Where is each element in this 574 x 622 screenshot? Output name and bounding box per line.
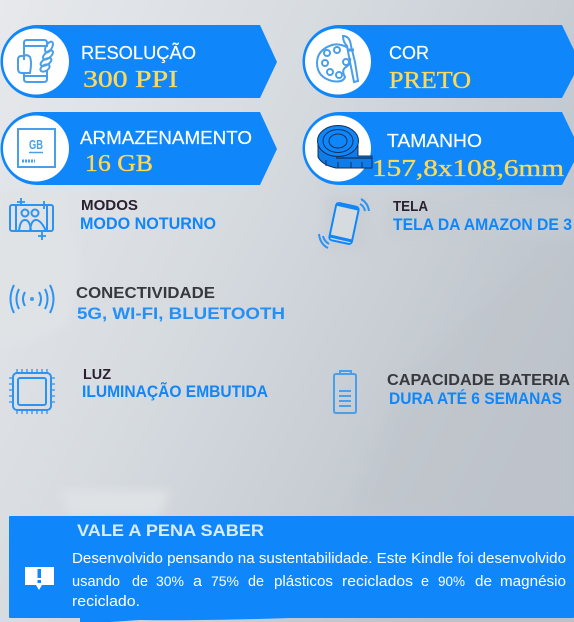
item: capacidade bateria — [334, 371, 570, 413]
body text: a — [193, 573, 203, 590]
panel: vale a pena saber — [9, 516, 574, 622]
item: tela — [319, 198, 572, 248]
icon: family screen — [10, 198, 53, 240]
body text: plásticos — [274, 573, 333, 590]
label: capacidade bateria: CAPACIDADE BATERIA — [387, 372, 570, 389]
body text: reciclados — [342, 573, 413, 590]
item: modos — [10, 197, 216, 240]
panel: cor — [302, 25, 574, 98]
body text: 75% — [211, 573, 239, 589]
label: resolução: RESOLUÇÃO — [81, 42, 196, 63]
item: luz — [9, 366, 268, 414]
body text: Desenvolvido pensando na sustentabilidade. Este Kindle foi desenvolvido — [72, 550, 566, 567]
body text: de — [132, 573, 148, 590]
icon: gb memory — [3, 116, 69, 182]
value: 16 gb: 16 GB — [85, 151, 153, 177]
icon: alert — [25, 567, 54, 590]
panel: tamanho — [303, 112, 574, 185]
value: dimensions: 157,8x108,6mm — [372, 156, 564, 182]
label: cor: COR — [389, 42, 429, 63]
value: modo noturno: MODO NOTURNO — [80, 215, 216, 233]
label: tamanho: TAMANHO — [387, 130, 482, 151]
icon: phone in hand — [3, 28, 69, 94]
body text: 30% — [156, 573, 184, 589]
body text: de — [248, 573, 264, 590]
label: conectividade: CONECTIVIDADE — [76, 285, 215, 302]
value: connectivity: 5G, WI-FI, BLUETOOTH — [77, 305, 285, 323]
label: tela: TELA — [393, 198, 428, 215]
label: luz: LUZ — [83, 366, 111, 383]
icon: vibrating phone — [319, 199, 369, 248]
heading: VALE A PENA SABER — [77, 522, 264, 540]
value: duration: DURA ATÉ 6 SEMANAS — [389, 389, 562, 408]
body text: 90% — [438, 573, 465, 589]
item: conectividade — [10, 285, 285, 323]
body text: e — [421, 573, 429, 590]
icon: paint palette — [305, 28, 371, 94]
icon: battery — [334, 371, 356, 413]
icon: measuring tape — [305, 116, 372, 182]
body text: reciclado. — [72, 593, 140, 610]
label: modos: MODOS — [81, 197, 138, 214]
body text: usando — [72, 573, 120, 590]
body text: de — [475, 573, 492, 590]
value: 300 ppi: 300 PPI — [83, 67, 178, 93]
panel: resolução — [0, 25, 277, 98]
value: preto: PRETO — [389, 68, 471, 94]
panel: armazenamento — [1, 112, 277, 185]
body text: magnésio — [500, 573, 566, 590]
icon: gb memory: GB — [29, 137, 43, 152]
label: armazenamento: ARMAZENAMENTO — [80, 127, 252, 148]
value: iluminação: ILUMINAÇÃO EMBUTIDA — [82, 381, 268, 401]
icon: chip — [9, 369, 55, 414]
icon: wireless signal — [10, 285, 54, 313]
body text — [72, 550, 566, 610]
